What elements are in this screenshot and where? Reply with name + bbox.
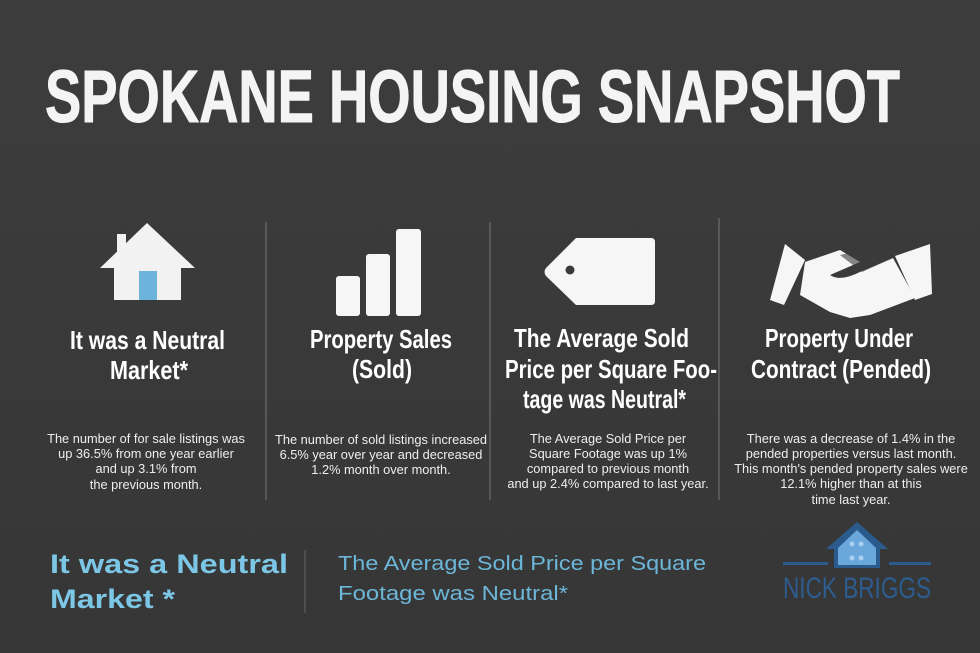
body text [507, 431, 709, 491]
body text: pended properties versus last month. [746, 446, 956, 461]
body text: and up 3.1% from [95, 461, 197, 476]
callout: price per sq ft: The Average Sold Price per Square [338, 553, 706, 575]
body text [734, 431, 968, 507]
icon: handshake [770, 244, 932, 318]
body text: time last year. [812, 492, 890, 507]
body text: 1.2% month over month. [311, 462, 451, 477]
panel: neutral market [47, 223, 245, 492]
body text: the previous month. [90, 477, 202, 492]
body text: 12.1% higher than at this [780, 476, 922, 491]
body text [275, 432, 487, 477]
body text: There was a decrease of 1.4% in the [747, 431, 955, 446]
body text: The number of for sale listings was [47, 431, 245, 446]
logo: Nick Briggs: NICK BRIGGS [783, 572, 931, 605]
heading: Contract (Pended) [751, 354, 931, 384]
body text: The number of sold listings increased [275, 432, 487, 447]
icon: price tag [544, 238, 655, 305]
callout: neutral market: Market * [50, 584, 176, 614]
heading: Property Sales [310, 324, 452, 354]
callout: neutral market [50, 549, 288, 614]
callout: price per sq ft: Footage was Neutral* [338, 583, 568, 605]
logo: Nick Briggs [783, 522, 931, 605]
panel: pended [734, 244, 968, 507]
body text: The Average Sold Price per [530, 431, 687, 446]
heading: Market* [110, 355, 189, 385]
heading [751, 323, 931, 384]
panel: price per sq ft [505, 238, 717, 491]
heading: tage was Neutral* [523, 384, 687, 414]
heading: Price per Square Foo- [505, 354, 717, 384]
body text: Square Footage was up 1% [529, 446, 687, 461]
body text [47, 431, 245, 492]
body text: compared to previous month [527, 461, 689, 476]
heading: The Average Sold [514, 323, 689, 353]
heading: It was a Neutral [70, 325, 225, 355]
icon: house [100, 223, 195, 300]
heading [70, 325, 225, 385]
heading [310, 324, 452, 384]
heading [505, 323, 717, 414]
callout: price per sq ft [338, 553, 706, 605]
heading: (Sold) [352, 354, 412, 384]
callout: neutral market: It was a Neutral [50, 549, 288, 579]
body text: 6.5% year over year and decreased [280, 447, 482, 462]
heading: Property Under [765, 323, 913, 353]
body text: This month's pended property sales were [734, 461, 968, 476]
body text: and up 2.4% compared to last year. [507, 476, 709, 491]
icon: bar chart [336, 229, 421, 316]
panel: property sales [275, 229, 487, 477]
body text: up 36.5% from one year earlier [58, 446, 235, 461]
